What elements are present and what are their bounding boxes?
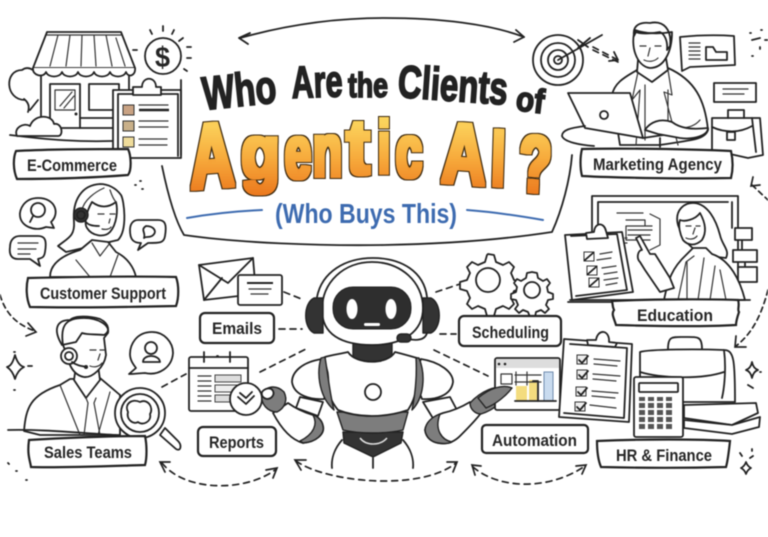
- robot right elbow band: [425, 414, 452, 444]
- panel: hr and finance: [559, 332, 761, 474]
- robot torso: [325, 352, 418, 416]
- heading: agentic ai: A: [440, 105, 489, 203]
- label: e-commerce: E-Commerce: [27, 156, 117, 175]
- label: sales teams: Sales Teams: [44, 443, 132, 462]
- heading: who are the clients of: Who: [200, 60, 279, 120]
- label: marketing agency: Marketing Agency: [593, 155, 722, 174]
- arrow: dashed bottom right: [472, 465, 586, 484]
- panel: education: [565, 196, 757, 326]
- icon: calculator: [634, 377, 683, 437]
- icon: chart window: [478, 358, 560, 410]
- icon: dollar coin: [133, 26, 191, 74]
- heading: agentic ai: I: [490, 113, 508, 203]
- icon: presentation board: [592, 196, 757, 282]
- robot waist band: [337, 412, 408, 433]
- icon: checklist clipboard: [559, 332, 632, 422]
- icon: dollar coin: $: [155, 42, 170, 74]
- robot: [262, 258, 510, 468]
- arrow: dashed to sales teams: [0, 295, 36, 336]
- label: scheduling: Scheduling: [472, 323, 549, 342]
- panel: automation: [478, 358, 588, 453]
- robot right ear: [423, 298, 439, 333]
- icon: clipboard: [565, 224, 634, 302]
- heading: who are the clients of: [200, 55, 547, 121]
- dots: [135, 181, 143, 189]
- robot pelvis: [343, 432, 403, 457]
- robot smile: [360, 438, 387, 444]
- robot visor: [333, 287, 411, 329]
- icon: magnifier: [115, 388, 180, 450]
- robot neck: [353, 342, 392, 365]
- panel: e-commerce: [9, 26, 191, 189]
- icon: marketing briefcase: [712, 110, 763, 158]
- label: education: [570, 299, 750, 326]
- heading: who are the clients of: Clients: [396, 55, 510, 115]
- robot right shoulder: [417, 359, 453, 399]
- icon: clipboard checklist: [113, 79, 181, 158]
- icon: storefront: [9, 32, 135, 141]
- icon: target and arrow: [533, 35, 618, 85]
- robot right connectors: [423, 397, 458, 420]
- sparkle: [7, 352, 32, 480]
- heading: agentic ai: g: [241, 111, 280, 194]
- panel: emails: [199, 258, 282, 343]
- icon: envelope and note: [199, 258, 282, 305]
- heading: agentic ai: ?: [517, 118, 555, 209]
- label: reports: Reports: [209, 433, 264, 452]
- arrow: dashed bottom center: [295, 460, 457, 481]
- robot left shoulder: [292, 359, 328, 399]
- figure: marketing man: [562, 22, 708, 147]
- robot left hand: [262, 387, 286, 412]
- robot left ear: [306, 298, 323, 333]
- heading: who are the clients of: of: [514, 80, 547, 121]
- label: hr and finance: HR & Finance: [616, 446, 712, 465]
- subtitle with rules: [187, 198, 543, 229]
- label: education: Education: [637, 306, 713, 325]
- heading: who are the clients of: the: [348, 67, 388, 105]
- sparkles: [740, 362, 761, 474]
- robot left connectors: [296, 397, 323, 416]
- label: customer support: Customer Support: [40, 284, 166, 303]
- robot right side strip: [412, 358, 423, 410]
- robot right forearm: [425, 402, 481, 444]
- icon: chat bubbles: [10, 198, 166, 266]
- title frame: [162, 155, 572, 245]
- label: e-commerce: [14, 149, 131, 179]
- heading: agentic ai: e: [285, 111, 311, 194]
- icon: briefcase: [640, 337, 735, 402]
- label: emails: Emails: [212, 319, 262, 338]
- robot mic tip: [397, 334, 411, 342]
- robot mic arm: [408, 333, 427, 340]
- robot legs: [332, 440, 413, 468]
- heading: agentic ai: [187, 103, 555, 209]
- panel: scheduling: [459, 254, 561, 346]
- heading: agentic ai: n: [313, 109, 342, 192]
- icon: person speech bubble: [129, 332, 173, 374]
- label: marketing agency: [580, 149, 732, 178]
- figure: teacher: [636, 203, 745, 300]
- figure: support agent: [50, 184, 136, 277]
- arrow: dashed up to marketing: [751, 177, 768, 200]
- arrow: top curved double arrow: [239, 18, 524, 44]
- heading: agentic ai: A: [187, 105, 236, 209]
- subtitle with rules: (Who Buys This): [275, 198, 457, 229]
- robot left fingers: [262, 388, 274, 399]
- robot left forearm: [273, 403, 323, 443]
- robot left side strip: [319, 357, 334, 410]
- label: automation: Automation: [492, 431, 577, 450]
- label: hr and finance: [597, 440, 730, 468]
- icon: note bubble: [680, 35, 735, 71]
- panel: reports: [189, 352, 276, 456]
- robot headband: [317, 258, 427, 297]
- decorative dots: [750, 30, 768, 56]
- connectors: dashed links to robot: [162, 50, 618, 387]
- robot eyes: [346, 299, 396, 326]
- icon: small note: [714, 83, 756, 102]
- icon: books: [684, 403, 760, 434]
- panel: sales teams: [7, 316, 180, 480]
- heading: who are the clients of: Are: [291, 55, 343, 108]
- panel: customer support: [10, 184, 178, 307]
- heading: agentic ai: c: [396, 110, 422, 193]
- icon: gears: [460, 254, 553, 317]
- robot head: [322, 262, 423, 345]
- arrow: dashed bottom left: [160, 462, 277, 486]
- heading: agentic ai: i: [378, 106, 390, 189]
- label: sales teams: [8, 430, 146, 467]
- label: customer support: [27, 277, 178, 307]
- panel: marketing agency: [533, 22, 768, 178]
- robot left elbow band: [300, 415, 323, 443]
- heading: agentic ai: t: [346, 103, 370, 191]
- icon: calendar with check: [189, 352, 262, 415]
- robot chest button: [365, 384, 381, 400]
- arrow: dashed to hr and finance: [735, 290, 768, 347]
- figure: sales man: [24, 316, 120, 435]
- robot right hand: [470, 387, 510, 414]
